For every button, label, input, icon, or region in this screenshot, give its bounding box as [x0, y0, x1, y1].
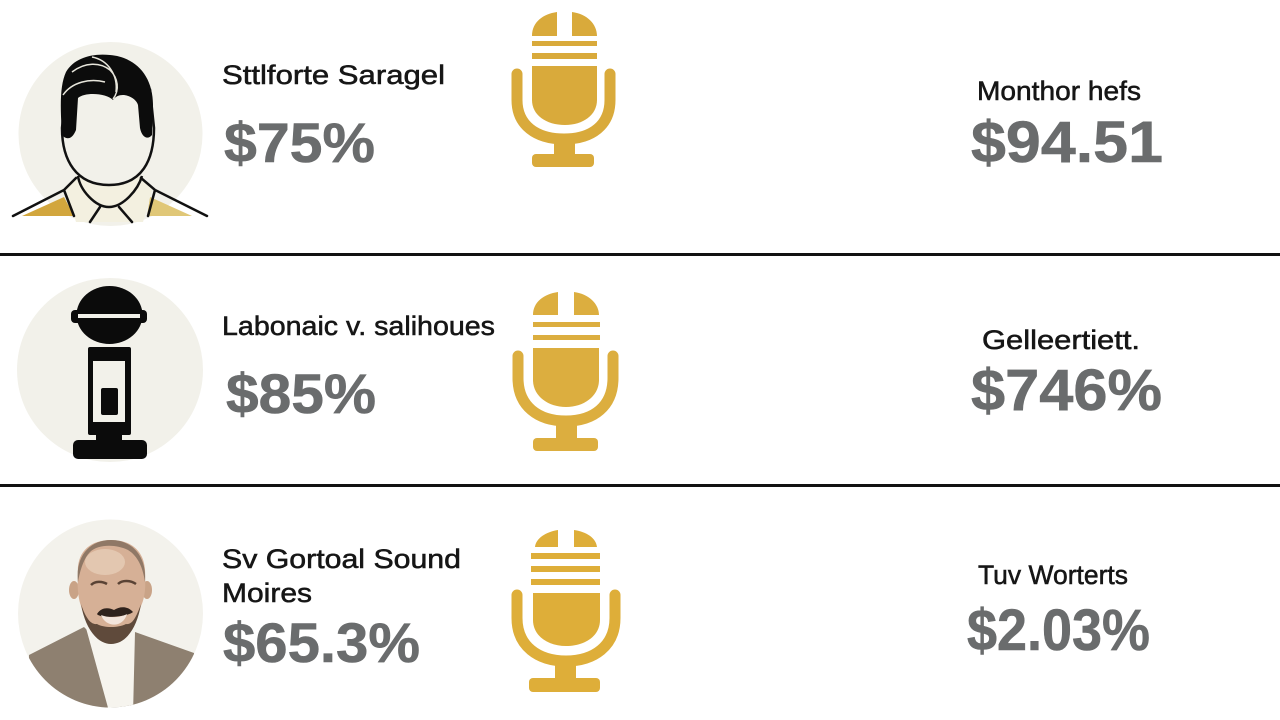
heading: row 1 right label: Monthor hefs	[977, 76, 1141, 106]
heading: row 3 left label second line: Moires	[222, 578, 312, 608]
value: row 2 left figure: $85%	[226, 362, 376, 425]
value: row 1 right figure: $94.51	[971, 110, 1163, 175]
icon: gold microphone	[517, 530, 615, 692]
value: row 1 left figure: $75%	[224, 111, 375, 174]
heading: row 1 left label: Sttlforte Saragel	[222, 60, 445, 90]
heading: row 3 right label: Tuv Worterts	[978, 560, 1128, 590]
heading: row 3 left label: Sv Gortoal Sound	[222, 544, 461, 574]
heading: row 2 left label: Labonaic v. salihoues	[222, 311, 495, 341]
icon: black microphone on stand	[17, 278, 203, 462]
panel: row 2	[17, 278, 1162, 462]
panel: row 3	[18, 520, 1150, 715]
value: row 3 right figure: $2.03%	[967, 598, 1150, 663]
value: row 3 left figure: $65.3%	[223, 611, 420, 674]
icon: man portrait line art	[13, 42, 207, 226]
heading: row 2 right label: Gelleertiett.	[982, 325, 1140, 355]
value: row 2 right figure: $746%	[971, 358, 1162, 423]
panel: row 1	[13, 12, 1163, 226]
icon: gold microphone	[517, 12, 610, 167]
icon: smiling man portrait	[18, 520, 203, 715]
icon: gold microphone	[518, 292, 613, 451]
